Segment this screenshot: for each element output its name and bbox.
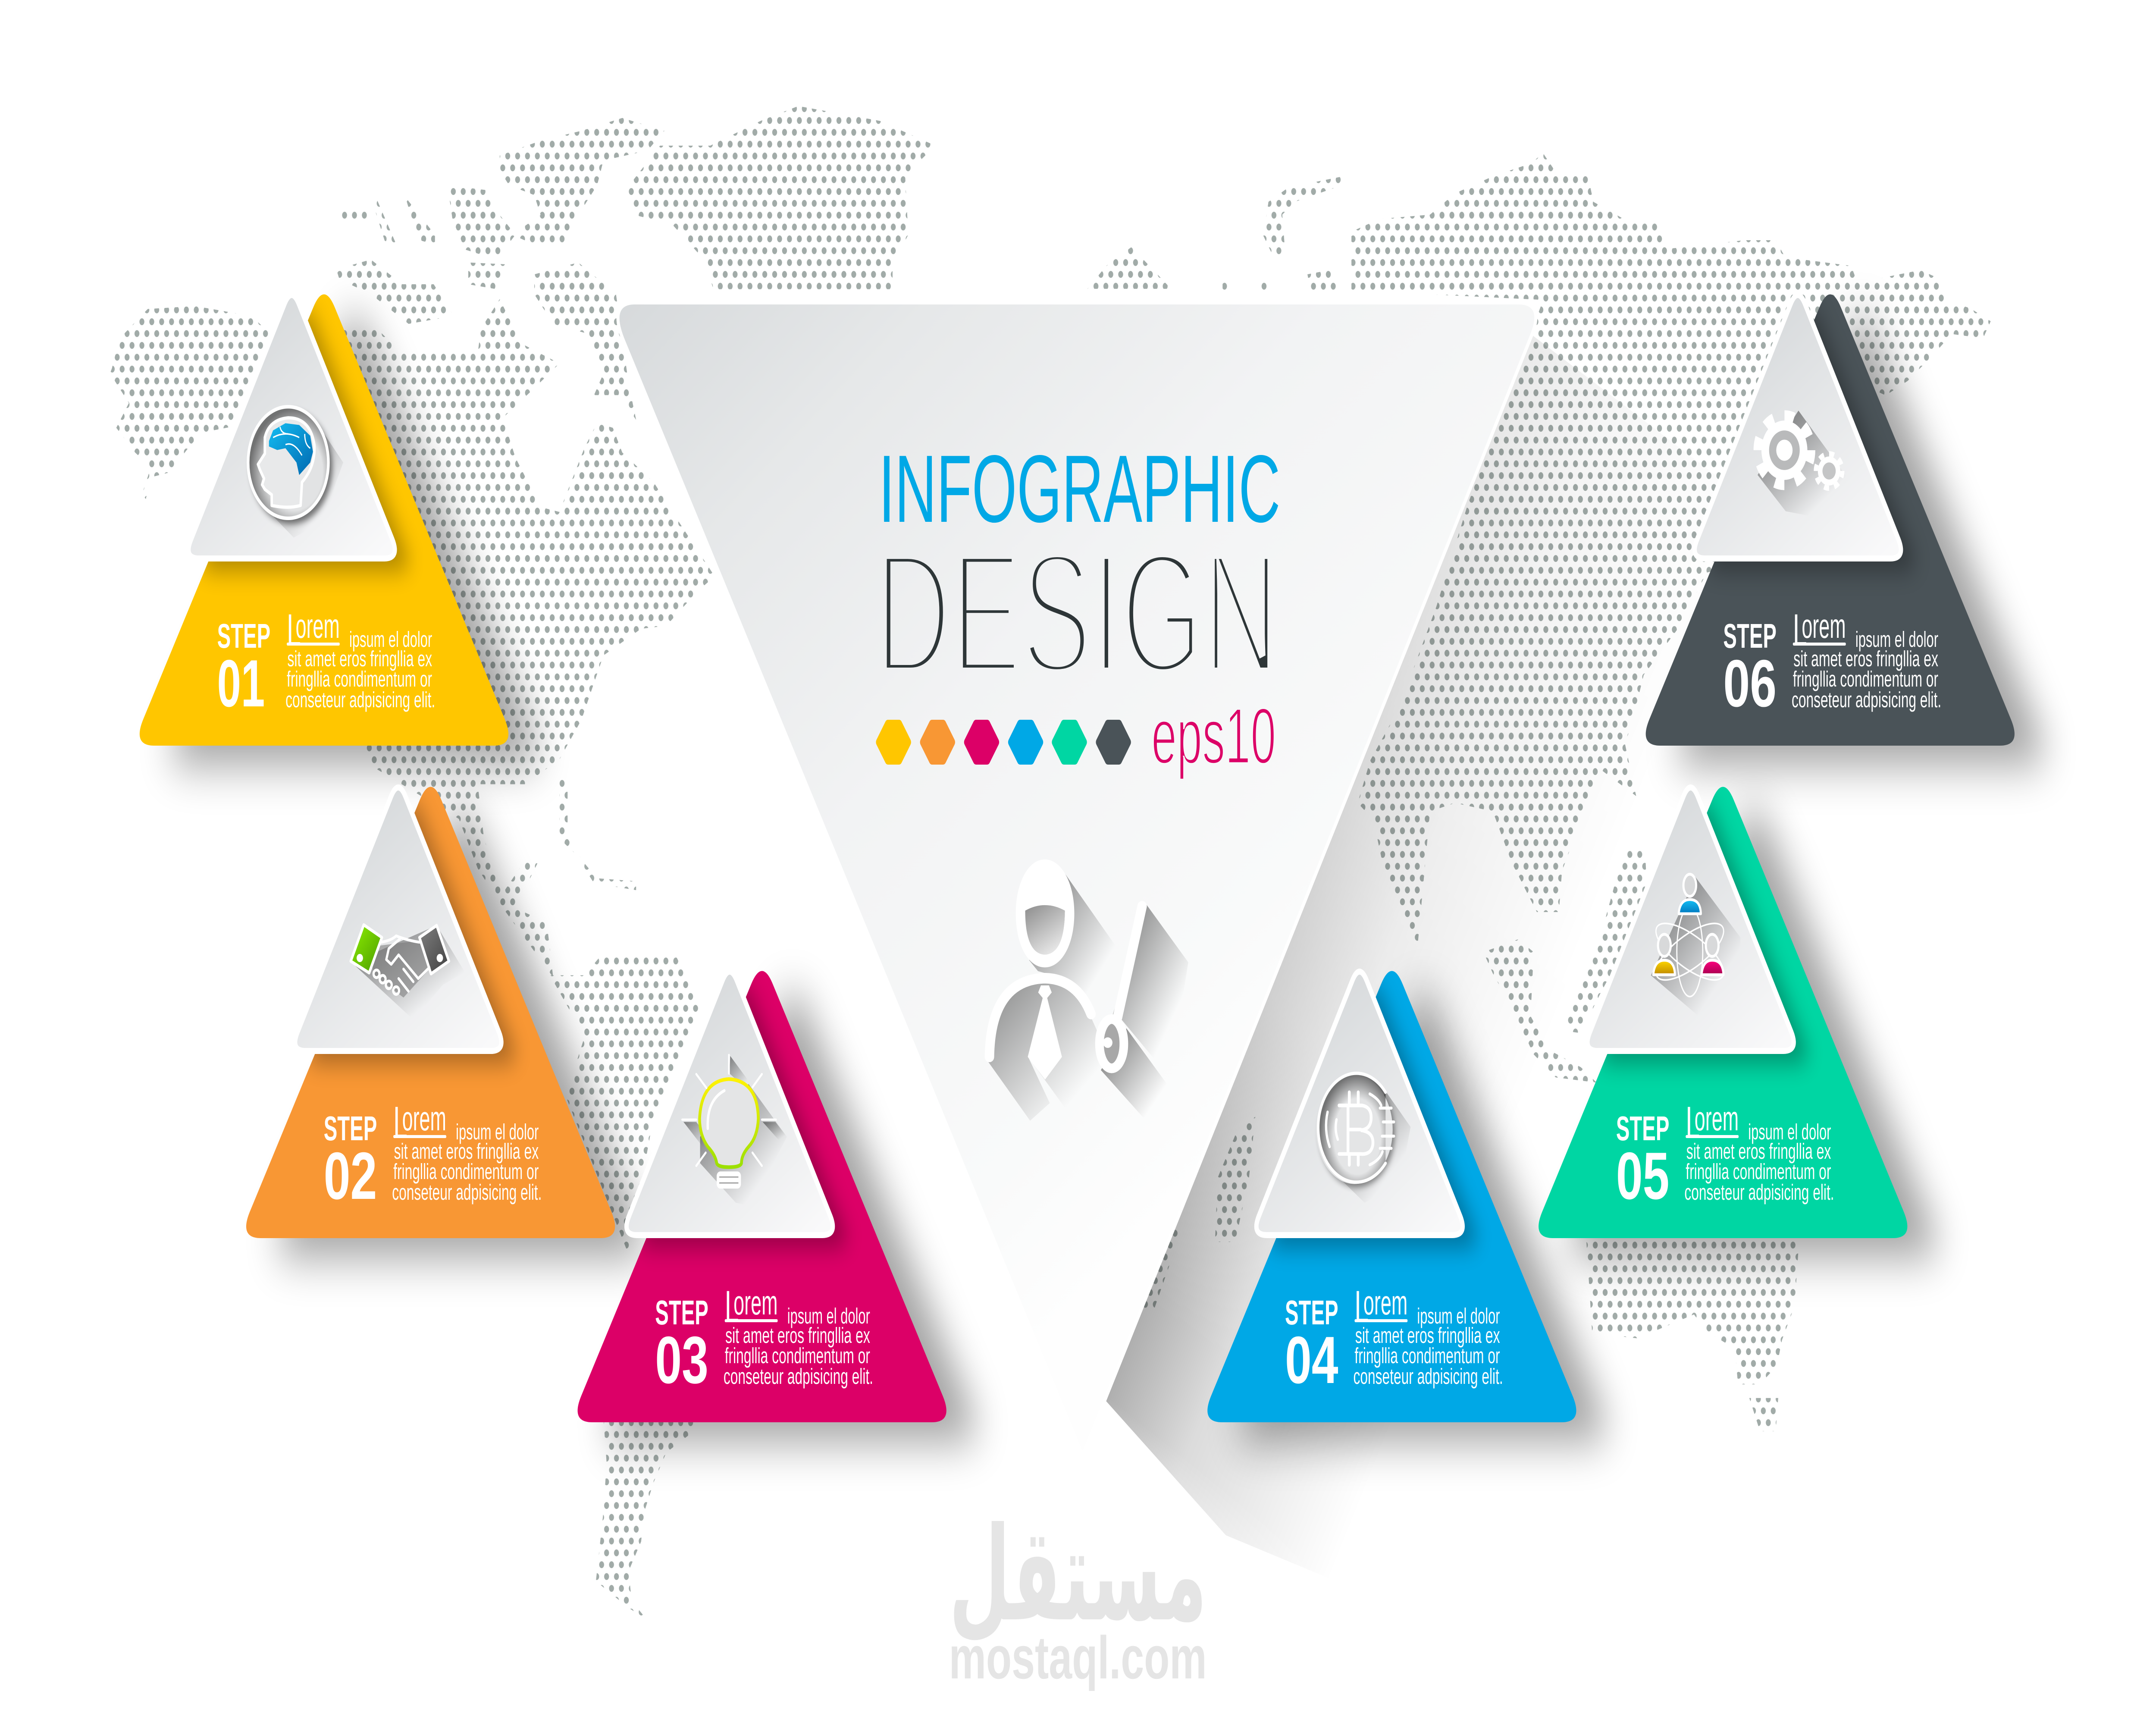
icon: bitcoin coin (1316, 1073, 1410, 1203)
step 3 text: conseteur adpisicing elit. (724, 1364, 873, 1389)
step 2 drop shadow (277, 806, 646, 1258)
step 4 blue triangle (1207, 971, 1576, 1422)
step 2 text: fringllia condimentum or (393, 1160, 539, 1184)
step 5 text: STEP (1616, 1109, 1669, 1148)
heading: DESIGN: DESIGN (875, 517, 1279, 709)
step 6 text: 06 (1723, 646, 1777, 721)
central triangle panel (620, 304, 1534, 1451)
step 1 text: orem (295, 607, 340, 645)
step 6 text: conseteur adpisicing elit. (1792, 688, 1941, 712)
step 5 drop shadow (1570, 806, 1938, 1258)
icon: light bulb (682, 1055, 792, 1206)
step 5 text: fringllia condimentum or (1686, 1160, 1831, 1184)
step 4 text: ipsum el dolor (1417, 1304, 1500, 1329)
step 1 drop shadow (170, 314, 539, 765)
step 6 text: fringllia condimentum or (1793, 667, 1938, 692)
step 2 text: sit amet eros fringllia ex (394, 1139, 539, 1164)
step 1 text: STEP (217, 617, 270, 655)
icon: people atom network (1650, 874, 1740, 1019)
step 4 text: conseteur adpisicing elit. (1354, 1364, 1503, 1389)
step 3 text: STEP (655, 1293, 708, 1332)
icon: presenter with pointer (988, 859, 1188, 1138)
step 2 text: conseteur adpisicing elit. (392, 1180, 542, 1205)
step 5 card (1539, 787, 1938, 1258)
step 3 text: L (725, 1282, 739, 1332)
step 5 text (1616, 1098, 1834, 1213)
step 3 card (578, 971, 977, 1442)
step 2 text: L (393, 1098, 407, 1148)
step 1 text: conseteur adpisicing elit. (285, 688, 435, 712)
step 3 text: sit amet eros fringllia ex (725, 1324, 870, 1348)
step 4 text: L (1354, 1282, 1369, 1332)
step 5 text: ipsum el dolor (1748, 1120, 1831, 1145)
step 6 text (1723, 605, 1941, 721)
step 1 text: fringllia condimentum or (287, 667, 432, 692)
step 3 text (655, 1282, 873, 1397)
watermark logo (949, 1500, 1207, 1691)
step 6 drop shadow (1677, 314, 2045, 765)
step 6 text: ipsum el dolor (1855, 627, 1938, 652)
step 1 grey icon triangle (188, 295, 395, 558)
step 3 drop shadow (608, 990, 977, 1442)
heading: INFOGRAPHIC: INFOGRAPHIC (879, 435, 1280, 542)
step 5 green triangle (1539, 787, 1907, 1238)
step 2 grey icon triangle (295, 787, 501, 1051)
step 4 text: STEP (1285, 1293, 1338, 1332)
step 4 text (1285, 1282, 1503, 1397)
step 1 text: L (287, 605, 301, 656)
step 4 text: 04 (1285, 1323, 1338, 1397)
step 3 text: 03 (655, 1323, 708, 1397)
step 6 card (1646, 294, 2045, 765)
step 4 grey icon triangle (1257, 972, 1463, 1235)
step 1 text: sit amet eros fringllia ex (287, 647, 432, 671)
step 6 slate triangle (1646, 294, 2015, 746)
step 4 text: fringllia condimentum or (1354, 1344, 1500, 1368)
step 6 grey icon triangle (1695, 295, 1901, 558)
step 2 orange triangle (246, 787, 615, 1238)
step 3 text: orem (733, 1283, 778, 1322)
icon: head with brain (248, 407, 343, 538)
watermark url: mostaql.com (949, 1624, 1207, 1691)
step 5 text: sit amet eros fringllia ex (1686, 1139, 1831, 1164)
step 5 grey icon triangle (1588, 787, 1794, 1051)
dotted world map (110, 107, 1990, 1615)
step 4 text: orem (1363, 1283, 1407, 1322)
icon: gears (1758, 411, 1860, 516)
step 4 card (1207, 971, 1607, 1442)
step 5 text: orem (1695, 1099, 1739, 1138)
colour hexagons row (879, 724, 1128, 760)
step 2 text: STEP (324, 1109, 377, 1148)
step 3 text: ipsum el dolor (787, 1304, 870, 1329)
step 2 card (246, 787, 646, 1258)
step 1 text (217, 605, 435, 721)
step 2 text: 02 (324, 1138, 377, 1213)
step 3 text: fringllia condimentum or (725, 1344, 870, 1368)
step 6 text: orem (1802, 607, 1846, 645)
step 1 text: ipsum el dolor (349, 627, 432, 652)
step 5 text: conseteur adpisicing elit. (1684, 1180, 1834, 1205)
step 2 text: ipsum el dolor (456, 1120, 539, 1145)
step 2 text (324, 1098, 542, 1213)
step 4 text: sit amet eros fringllia ex (1355, 1324, 1500, 1348)
step 3 grey icon triangle (627, 972, 833, 1235)
step 1 text: 01 (217, 646, 265, 721)
step 2 text: orem (402, 1099, 446, 1138)
step 4 drop shadow (1238, 990, 1607, 1442)
label: eps10: eps10 (1151, 691, 1276, 780)
central panel long shadow (1106, 336, 1619, 1560)
step 6 text: sit amet eros fringllia ex (1793, 647, 1938, 671)
watermark arabic wordmark: مستقل (949, 1500, 1207, 1650)
step 5 text: L (1686, 1098, 1700, 1148)
step 6 text: STEP (1723, 617, 1777, 655)
step 3 magenta triangle (578, 971, 946, 1422)
step 1 yellow triangle (140, 294, 508, 746)
icon: handshake (351, 925, 465, 1019)
step 1 card (140, 294, 539, 765)
step 6 text: L (1793, 605, 1807, 656)
step 5 text: 05 (1616, 1138, 1669, 1213)
